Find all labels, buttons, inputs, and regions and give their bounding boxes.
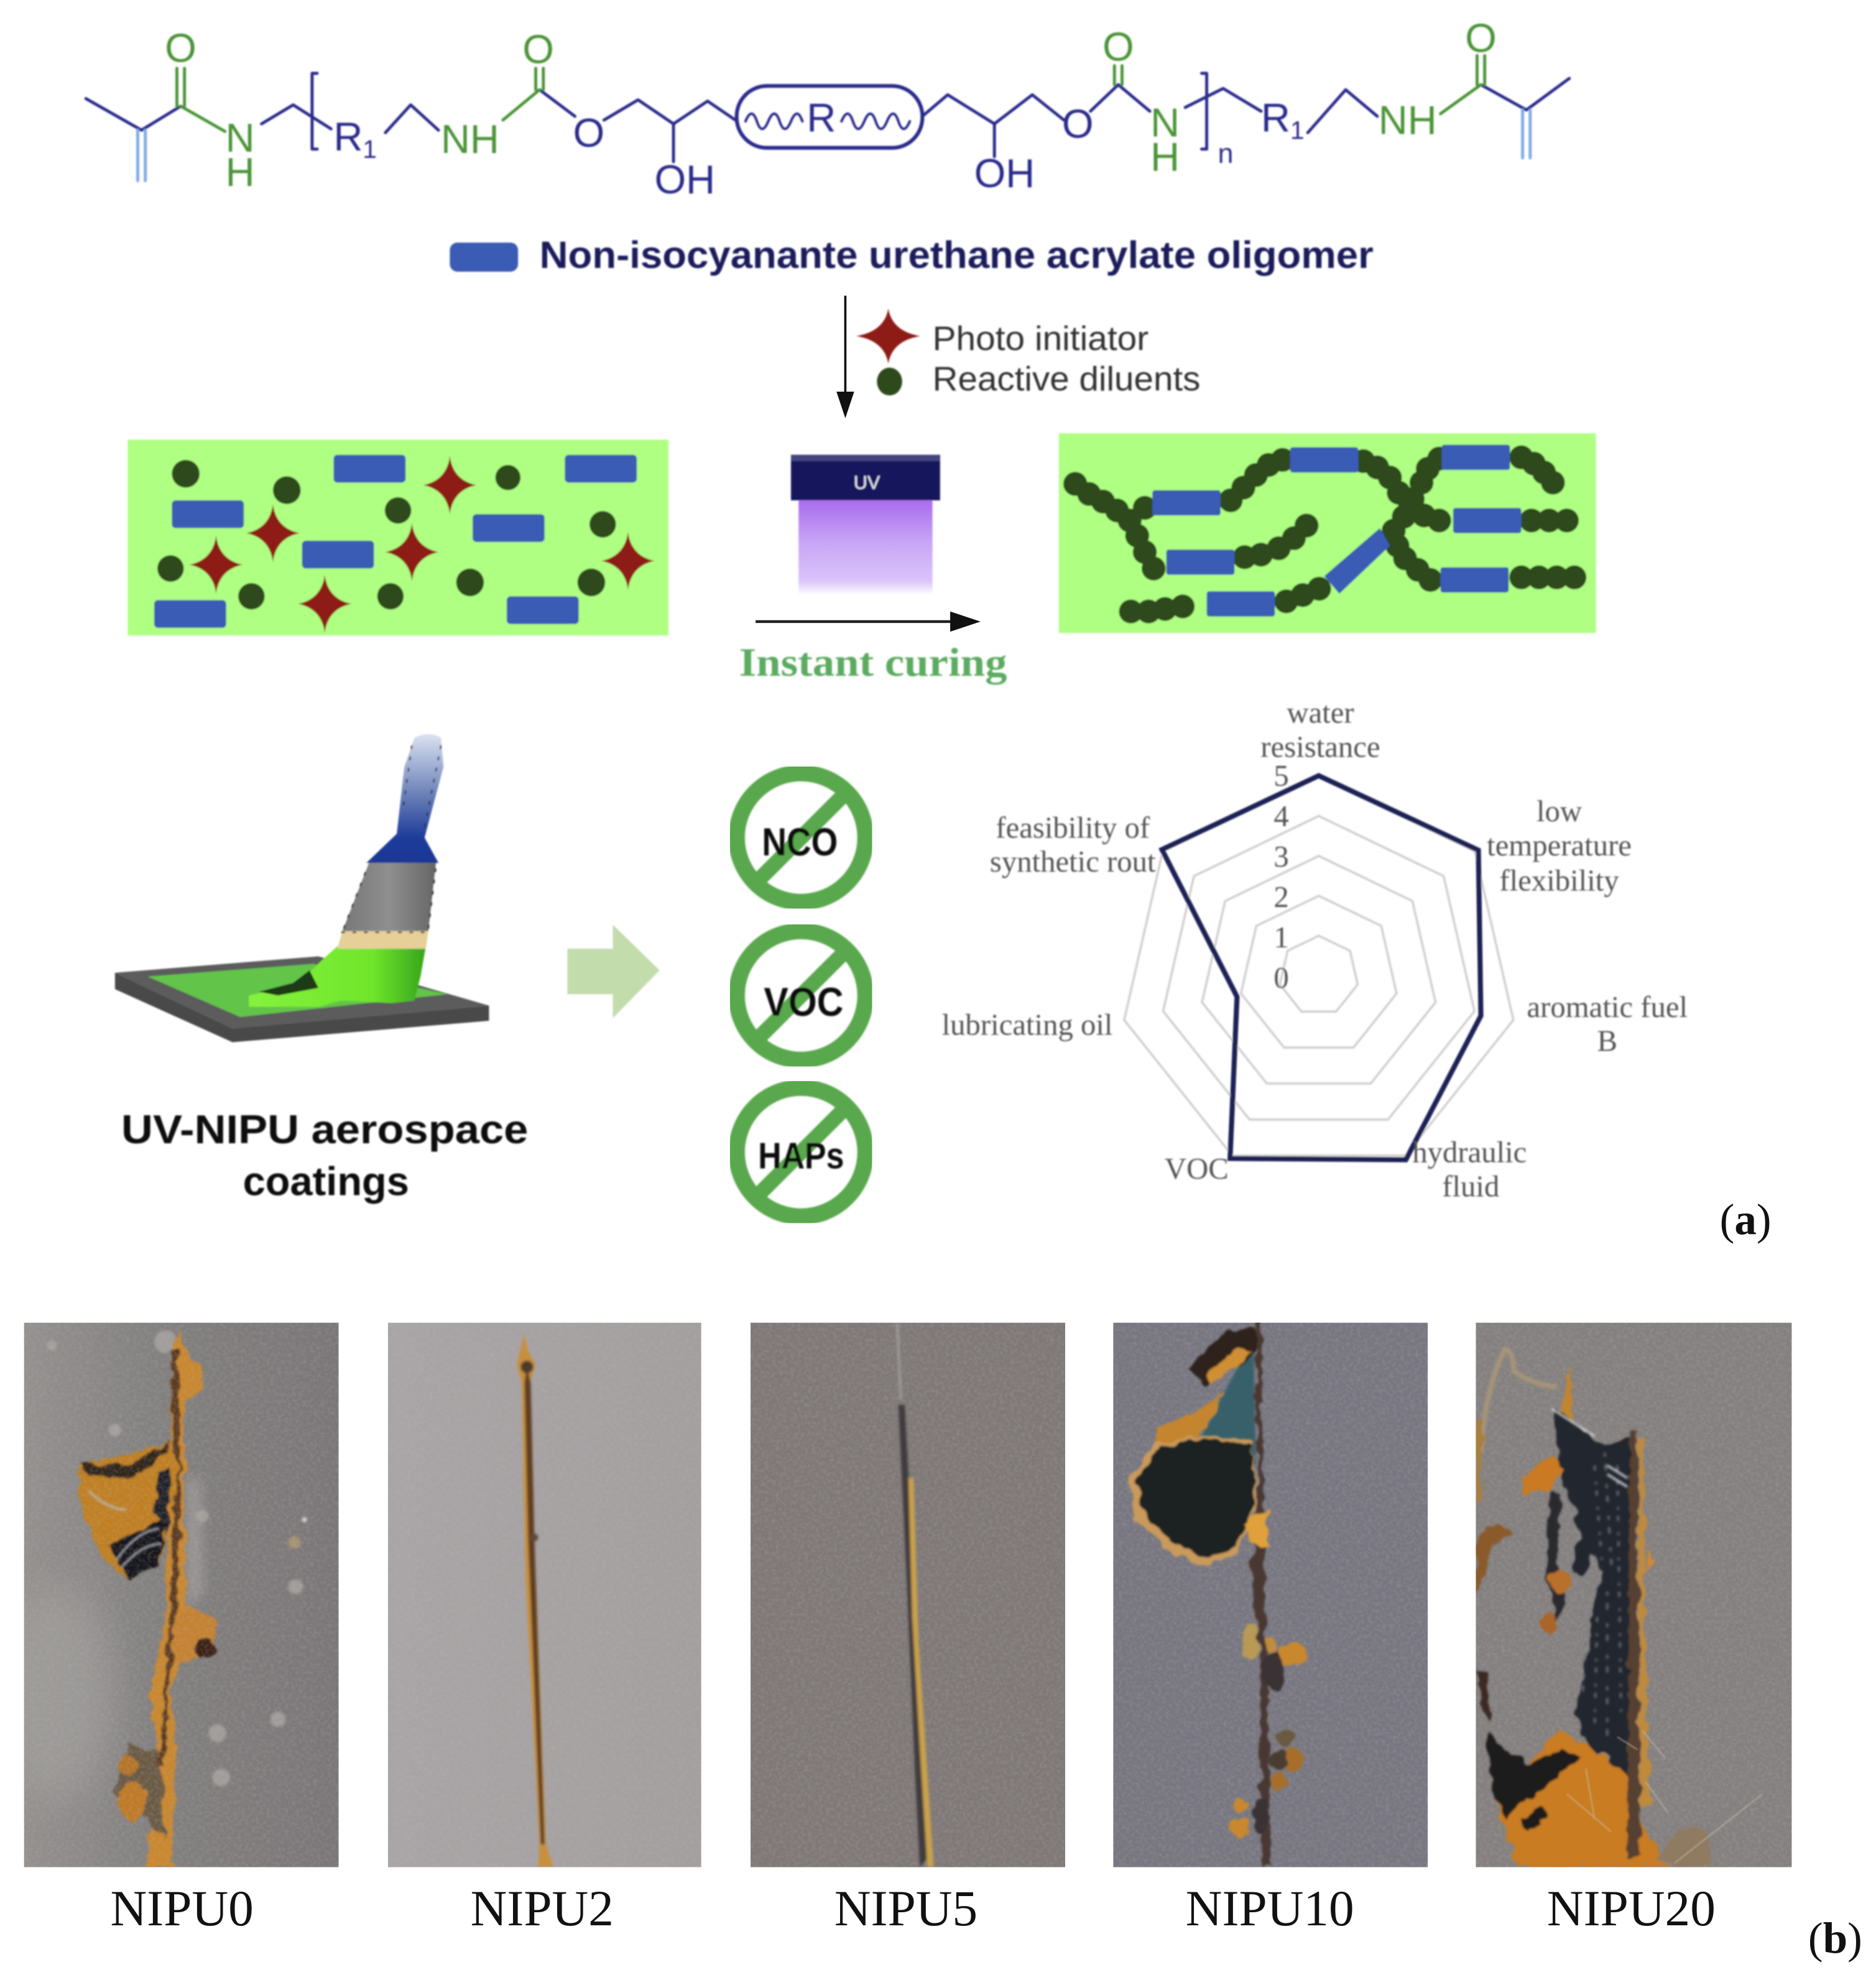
label: instant curing: Instant curing xyxy=(739,640,1007,685)
chemical structure: oligomer: NH xyxy=(1379,97,1437,142)
chemical structure: oligomer: R xyxy=(333,114,363,159)
label: NIPU5: NIPU5 xyxy=(834,1881,977,1936)
icon: paint brush on green coated plate xyxy=(115,734,489,1043)
chemical structure: oligomer: OH xyxy=(974,150,1035,196)
icon: no NCO xyxy=(737,773,866,902)
label: NIPU0: NIPU0 xyxy=(110,1881,254,1936)
radar chart: 4 xyxy=(1273,799,1289,833)
radar chart: VOC xyxy=(1165,1152,1229,1186)
chemical structure: oligomer: H xyxy=(1150,134,1180,179)
radar chart: fluid xyxy=(1442,1169,1499,1203)
radar chart: low xyxy=(1536,794,1582,828)
legend: photo initiator and reactive diluents xyxy=(856,308,1200,398)
radar chart: hydraulic xyxy=(1412,1136,1527,1169)
legend: photo initiator and reactive diluents: Photo initiator xyxy=(933,319,1148,357)
icon: UV lamp: UV xyxy=(854,472,880,493)
photo: NIPU20 xyxy=(1476,1323,1791,1867)
radar chart: synthetic rout xyxy=(990,845,1156,878)
chemical structure: oligomer: n xyxy=(1218,139,1234,169)
arrow: big green xyxy=(567,925,660,1018)
chemical structure: oligomer: O xyxy=(573,110,604,155)
icon: no VOC: VOC xyxy=(764,979,843,1025)
radar chart: 0 xyxy=(1273,961,1289,995)
radar chart: 3 xyxy=(1273,840,1289,873)
icon: UV lamp xyxy=(791,455,940,595)
chemical structure: oligomer: H xyxy=(226,149,255,195)
arrow: down, adding reagents xyxy=(836,296,854,418)
chemical structure: oligomer: N xyxy=(226,115,255,160)
chemical structure: oligomer: NH xyxy=(441,116,499,162)
radar chart: 1 xyxy=(1273,921,1289,954)
photo: NIPU5 xyxy=(751,1323,1065,1867)
arrow: curing direction xyxy=(755,612,981,632)
icon: no HAPs xyxy=(737,1088,866,1217)
label: UV-NIPU aerospace coatings: coatings xyxy=(243,1158,409,1204)
chemical structure: oligomer: O xyxy=(522,27,554,72)
photo: NIPU10 xyxy=(1113,1323,1428,1867)
chemical structure: oligomer: O xyxy=(1102,24,1134,70)
radar chart: flexibility xyxy=(1499,864,1619,898)
icon: no NCO: NCO xyxy=(762,821,838,864)
legend: oligomer: Non-isocyanante urethane acrylate oligomer xyxy=(540,234,1374,276)
chemical structure: oligomer: OH xyxy=(655,157,715,202)
radar chart: lubricating oil xyxy=(942,1008,1112,1041)
radar chart: temperature xyxy=(1487,829,1632,862)
label: UV-NIPU aerospace coatings xyxy=(121,1107,528,1204)
radar chart: B xyxy=(1597,1025,1617,1058)
radar chart: 5 xyxy=(1273,759,1289,793)
chemical structure: oligomer xyxy=(86,15,1569,202)
label: UV-NIPU aerospace coatings: UV-NIPU aerospace xyxy=(121,1107,528,1152)
panel: cured network xyxy=(1059,433,1596,633)
label: NIPU10: NIPU10 xyxy=(1186,1881,1354,1936)
radar chart: feasibility of xyxy=(996,811,1150,844)
chemical structure: oligomer: R xyxy=(806,94,836,140)
label: panel (b): (b) xyxy=(1808,1915,1862,1963)
chemical structure: oligomer: O xyxy=(1465,15,1497,60)
chemical structure: oligomer: 1 xyxy=(363,135,377,163)
label: panel (a): (a) xyxy=(1720,1195,1772,1244)
icon: no HAPs: HAPs xyxy=(758,1136,844,1177)
chemical structure: oligomer: O xyxy=(165,25,196,71)
radar chart: 2 xyxy=(1273,880,1289,914)
icon: no VOC xyxy=(737,931,866,1060)
photo: NIPU0 xyxy=(0,1323,339,1867)
chemical structure: oligomer: N xyxy=(1150,100,1180,145)
radar chart: aromatic fuel xyxy=(1527,990,1688,1024)
radar chart: resistance xyxy=(1260,730,1380,763)
chemical structure: oligomer: O xyxy=(1062,101,1094,147)
label: NIPU2: NIPU2 xyxy=(471,1881,614,1936)
radar chart xyxy=(942,696,1688,1203)
photo: NIPU2 xyxy=(388,1323,701,1867)
label: NIPU20: NIPU20 xyxy=(1547,1881,1716,1936)
radar chart: water xyxy=(1287,696,1354,729)
chemical structure: oligomer: 1 xyxy=(1290,116,1305,145)
panel: uncured mixture xyxy=(127,440,668,635)
legend: photo initiator and reactive diluents: Reactive diluents xyxy=(933,359,1200,398)
chemical structure: oligomer: R xyxy=(1261,94,1290,140)
